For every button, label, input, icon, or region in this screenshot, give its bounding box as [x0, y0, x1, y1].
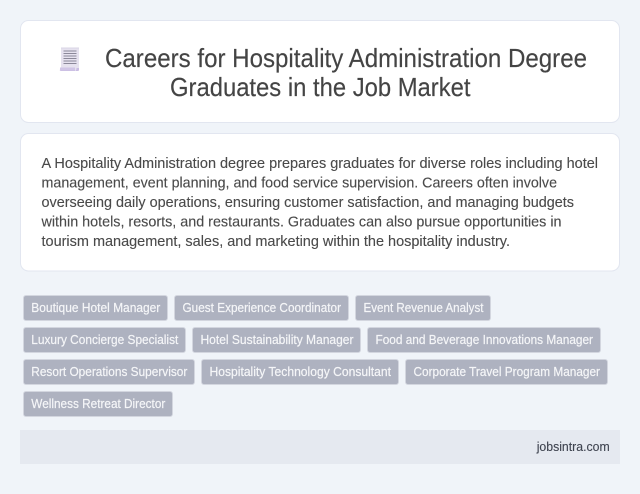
tag: Luxury Concierge Specialist: Luxury Concierge Specialist	[31, 332, 179, 347]
text block: description	[41, 156, 598, 250]
tag: Hotel Sustainability Manager	[192, 328, 360, 352]
tag: Food and Beverage Innovations Manager	[368, 328, 600, 352]
tag: Hospitality Technology Consultant: Hospitality Technology Consultant	[210, 364, 391, 379]
tag: Corporate Travel Program Manager	[406, 360, 608, 384]
tag: Guest Experience Coordinator	[174, 296, 348, 320]
icon: document scroll	[60, 48, 79, 71]
tag: Wellness Retreat Director	[24, 392, 172, 416]
tag: Corporate Travel Program Manager: Corporate Travel Program Manager	[414, 364, 601, 379]
tag: Event Revenue Analyst: Event Revenue Analyst	[364, 300, 484, 315]
tag: Resort Operations Supervisor: Resort Operations Supervisor	[31, 364, 188, 379]
panel: header card	[20, 20, 620, 122]
tag: Food and Beverage Innovations Manager: Food and Beverage Innovations Manager	[376, 332, 594, 347]
text block: description: A Hospitality Administration degree prepares graduates for diverse roles including hotel	[42, 156, 598, 172]
panel: description card	[20, 134, 620, 271]
title	[105, 45, 587, 102]
tag: Resort Operations Supervisor	[24, 360, 194, 384]
title: Graduates in the Job Market	[170, 74, 470, 102]
footer text: site name: jobsintra.com	[536, 439, 610, 454]
tag: Boutique Hotel Manager: Boutique Hotel Manager	[31, 300, 161, 315]
text block: description: tourism management, sales, and marketing within the hospitality industry.	[42, 234, 510, 250]
tag: Guest Experience Coordinator: Guest Experience Coordinator	[182, 300, 342, 315]
text block: description: management, event planning, and food service supervision. Careers often involve	[42, 176, 557, 192]
footer bar	[20, 430, 620, 464]
tag: Wellness Retreat Director: Wellness Retreat Director	[31, 396, 166, 411]
text block: description: within hotels, resorts, and restaurants. Graduates can also pursue opportunities in	[41, 214, 562, 230]
tag: Hotel Sustainability Manager: Hotel Sustainability Manager	[200, 332, 354, 347]
tag: Luxury Concierge Specialist	[24, 328, 186, 352]
title: Careers for Hospitality Administration Degree	[105, 45, 587, 73]
tag: Hospitality Technology Consultant	[202, 360, 398, 384]
tag: Event Revenue Analyst	[356, 296, 490, 320]
tag: Boutique Hotel Manager	[24, 296, 168, 320]
text block: description: overseeing daily operations, ensuring customer satisfaction, and managing budgets	[42, 195, 574, 211]
panel: career tags	[24, 296, 608, 416]
